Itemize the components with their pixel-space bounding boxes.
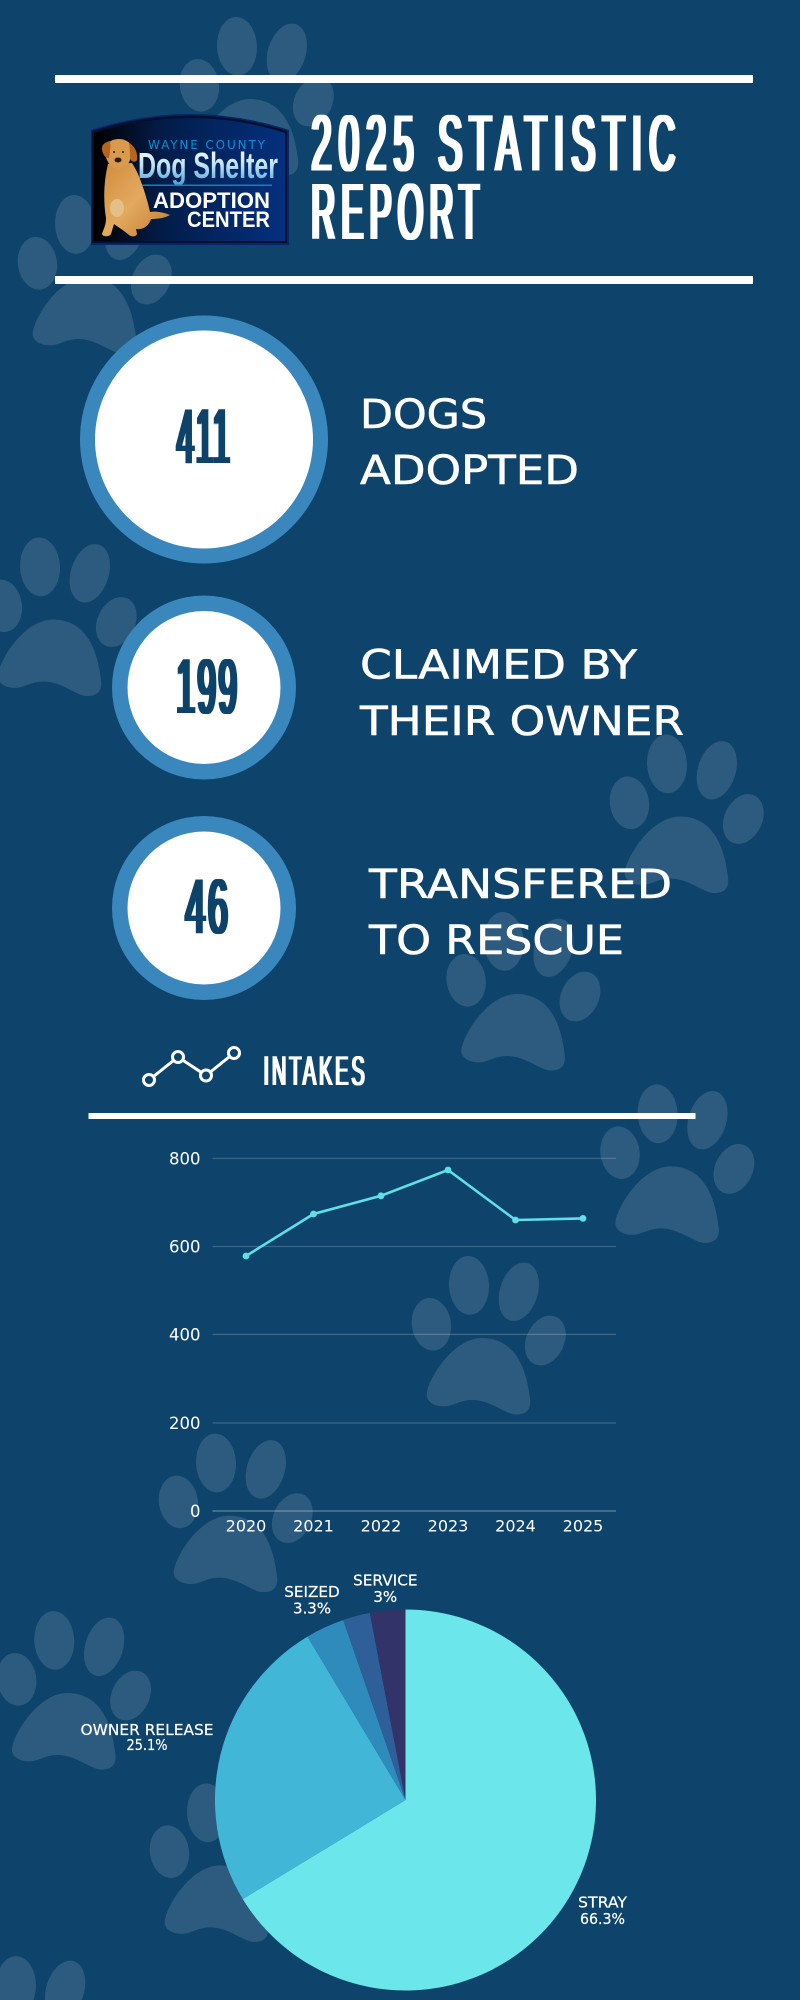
header bottom rule xyxy=(55,276,753,284)
pie chart: intake sources: 25.1% xyxy=(126,1736,168,1754)
line chart: intakes 2020-2025: 2023 xyxy=(428,1516,468,1536)
line chart: intakes 2020-2025: 400 xyxy=(169,1326,200,1344)
line chart: intakes 2020-2025: 2025 xyxy=(563,1516,603,1536)
icon: line chart xyxy=(144,1048,240,1086)
logo: Wayne County Dog Shelter Adoption Center: CENTER xyxy=(187,207,270,232)
line chart: intakes 2020-2025: 0 xyxy=(190,1502,200,1521)
pie chart: intake sources xyxy=(80,1572,628,1990)
title xyxy=(312,98,682,256)
pie chart: intake sources: 3% xyxy=(373,1588,397,1606)
stat: 46 transfered to rescue xyxy=(112,816,672,1000)
pie chart: intake sources: 66.3% xyxy=(580,1910,625,1928)
title: REPORT xyxy=(312,167,486,256)
logo: Wayne County Dog Shelter Adoption Center xyxy=(91,114,289,245)
stat: 46 transfered to rescue: TRANSFERED xyxy=(368,862,672,908)
stat: 411 dogs adopted xyxy=(80,316,579,564)
pie chart: intake sources: 3.3% xyxy=(293,1600,331,1618)
line chart: intakes 2020-2025 xyxy=(169,1150,616,1536)
logo: Wayne County Dog Shelter Adoption Center: Dog Shelter xyxy=(138,145,278,186)
header top rule xyxy=(55,75,753,83)
logo: Wayne County Dog Shelter Adoption Center: WAYNE COUNTY xyxy=(148,138,266,152)
line chart: intakes 2020-2025: 200 xyxy=(169,1414,200,1433)
stat: 411 dogs adopted: DOGS xyxy=(360,392,487,438)
stat: 199 claimed by their owner xyxy=(112,596,684,780)
stat: 411 dogs adopted: ADOPTED xyxy=(360,448,579,494)
pie chart: intake sources: SERVICE xyxy=(353,1572,418,1590)
pie chart: intake sources: OWNER RELEASE xyxy=(80,1721,214,1739)
icon: golden retriever xyxy=(102,139,170,236)
stat: 411 dogs adopted: 411 xyxy=(177,392,232,480)
intakes rule xyxy=(88,1113,696,1119)
text: INTAKES xyxy=(264,1047,368,1094)
logo: Wayne County Dog Shelter Adoption Center: ADOPTION xyxy=(153,188,270,213)
stat: 46 transfered to rescue: 46 xyxy=(186,862,230,950)
stat: 199 claimed by their owner: 199 xyxy=(176,642,240,730)
line chart: intakes 2020-2025: 600 xyxy=(169,1238,200,1256)
line chart: intakes 2020-2025: 2021 xyxy=(293,1516,334,1536)
pie chart: intake sources: SEIZED xyxy=(284,1583,340,1601)
line chart: intakes 2020-2025: 800 xyxy=(169,1150,200,1168)
stat: 199 claimed by their owner: CLAIMED BY xyxy=(360,642,638,688)
pie chart: intake sources: STRAY xyxy=(578,1894,628,1912)
stat: 199 claimed by their owner: THEIR OWNER xyxy=(359,699,684,745)
line chart: intakes 2020-2025: 2024 xyxy=(495,1516,536,1536)
line chart: intakes 2020-2025: 2020 xyxy=(226,1516,266,1536)
line chart: intakes 2020-2025: 2022 xyxy=(361,1516,401,1536)
stat: 46 transfered to rescue: TO RESCUE xyxy=(368,918,624,964)
